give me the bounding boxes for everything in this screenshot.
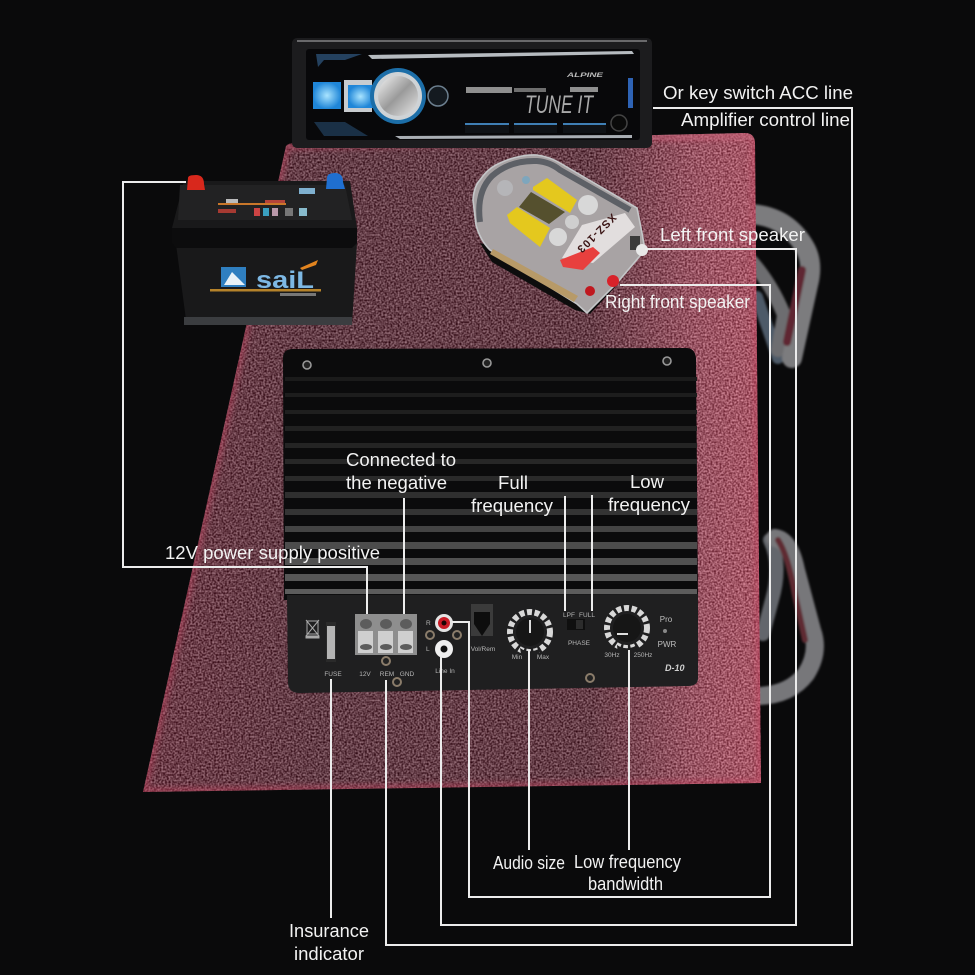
- wire: low frequency bandwidth: [628, 650, 630, 850]
- white RCA output: [630, 236, 640, 250]
- RCA line input: L: [426, 646, 430, 653]
- label: low frequency bandwidth: Low frequency: [574, 852, 681, 872]
- red panel: [560, 247, 600, 270]
- subwoofer cabinet: [130, 125, 770, 800]
- battery: [172, 173, 357, 325]
- wire: line-in left to left speaker: [441, 249, 796, 925]
- label: connected to the negative: Connected to: [346, 450, 456, 470]
- wire: negative: [403, 498, 405, 614]
- radio volume knob: [370, 68, 426, 124]
- amplifier board: [283, 348, 698, 693]
- RCA line input: Line In: [435, 668, 455, 675]
- heat sink: [283, 348, 698, 600]
- base: [480, 243, 617, 314]
- battery top label: [218, 188, 315, 216]
- label: insurance indicator: Insurance: [289, 921, 369, 941]
- radio preset buttons: [465, 123, 606, 133]
- label: connected to the negative: [346, 450, 456, 493]
- red RCA output: [607, 275, 619, 287]
- model text: XSZ-103: [575, 211, 618, 255]
- label: full frequency: [471, 473, 553, 516]
- battery logo: [210, 260, 321, 296]
- radio side slot: [628, 78, 633, 108]
- label: acc line: Or key switch ACC line: [663, 83, 853, 103]
- phase switch: [563, 612, 595, 647]
- dome rim: [479, 161, 630, 222]
- label: low frequency bandwidth: bandwidth: [588, 874, 663, 894]
- lower handle: [758, 538, 815, 696]
- label: low frequency: [608, 472, 690, 515]
- label: full frequency: frequency: [471, 496, 553, 516]
- LPF knob: [604, 608, 652, 659]
- power terminal block: REM: [380, 671, 394, 678]
- volume remote port: [471, 604, 495, 653]
- label: insurance indicator: indicator: [294, 944, 364, 964]
- label: low frequency bandwidth: [574, 852, 681, 894]
- RCA line input: R: [426, 620, 431, 627]
- white panel: [562, 213, 635, 263]
- label: right front speaker: Right front speaker: [605, 292, 750, 312]
- radio display: [466, 87, 598, 119]
- label: amplifier control line: Amplifier control line: [681, 110, 850, 130]
- power indicator: Pro: [660, 615, 673, 624]
- control panel: [287, 594, 698, 693]
- label: low frequency: Low: [630, 472, 665, 492]
- phase switch: PHASE: [568, 640, 591, 647]
- yellow capacitors: [533, 178, 577, 213]
- wire: fuse to insurance label: [330, 679, 332, 918]
- label: full frequency: Full: [498, 473, 528, 493]
- battery terminals: [187, 175, 205, 190]
- radio brand: ALPINE: [565, 73, 605, 79]
- fuse: FUSE: [324, 671, 342, 678]
- level knob: Max: [537, 654, 550, 661]
- wire: low frequency: [591, 495, 593, 611]
- label: low frequency: frequency: [608, 495, 690, 515]
- wire: audio size: [528, 650, 530, 850]
- screws: [382, 631, 594, 686]
- power indicator: [658, 615, 677, 649]
- radio buttons: [313, 82, 341, 109]
- fuse: [324, 622, 342, 678]
- wire: battery positive to 12V: [123, 182, 367, 614]
- radio joystick: [428, 86, 448, 106]
- label: connected to the negative: the negative: [346, 473, 447, 493]
- label: 12V power supply positive: 12V power supply positive: [165, 543, 380, 563]
- clear dome: [473, 155, 645, 313]
- power indicator: PWR: [658, 640, 677, 649]
- label: left front speaker: Left front speaker: [660, 225, 805, 245]
- phase switch: LPF: [563, 612, 575, 619]
- phase switch: FULL: [579, 612, 595, 619]
- level knob: Min: [512, 654, 523, 661]
- gold board edge: [490, 249, 578, 302]
- RCA line input: [426, 614, 455, 675]
- power terminal block: [355, 614, 417, 678]
- volume remote port: Vol/Rem: [471, 646, 495, 653]
- battery logo: saiL: [256, 267, 314, 294]
- mounting screws: [303, 357, 671, 369]
- power terminal block: 12V: [359, 671, 371, 678]
- LPF knob: 30Hz: [604, 652, 620, 659]
- LPF knob: 250Hz: [634, 652, 652, 659]
- silver rivets: [578, 195, 598, 215]
- icon: recycle bin mark: [306, 620, 319, 638]
- power terminal block: GND: [400, 671, 415, 678]
- label: insurance indicator: [289, 921, 369, 964]
- radio display: TUNE IT: [525, 91, 594, 119]
- label: audio size: Audio size: [493, 853, 565, 873]
- model label: D-10: [665, 663, 685, 673]
- level knob: [510, 612, 550, 661]
- wire: full frequency: [564, 496, 566, 611]
- car radio head unit: [292, 38, 652, 148]
- upper handle: [750, 214, 810, 358]
- wire: line-in right to right speaker: [452, 285, 770, 897]
- wire: remote to radio control line: [386, 108, 852, 945]
- crossover converter: [473, 155, 648, 314]
